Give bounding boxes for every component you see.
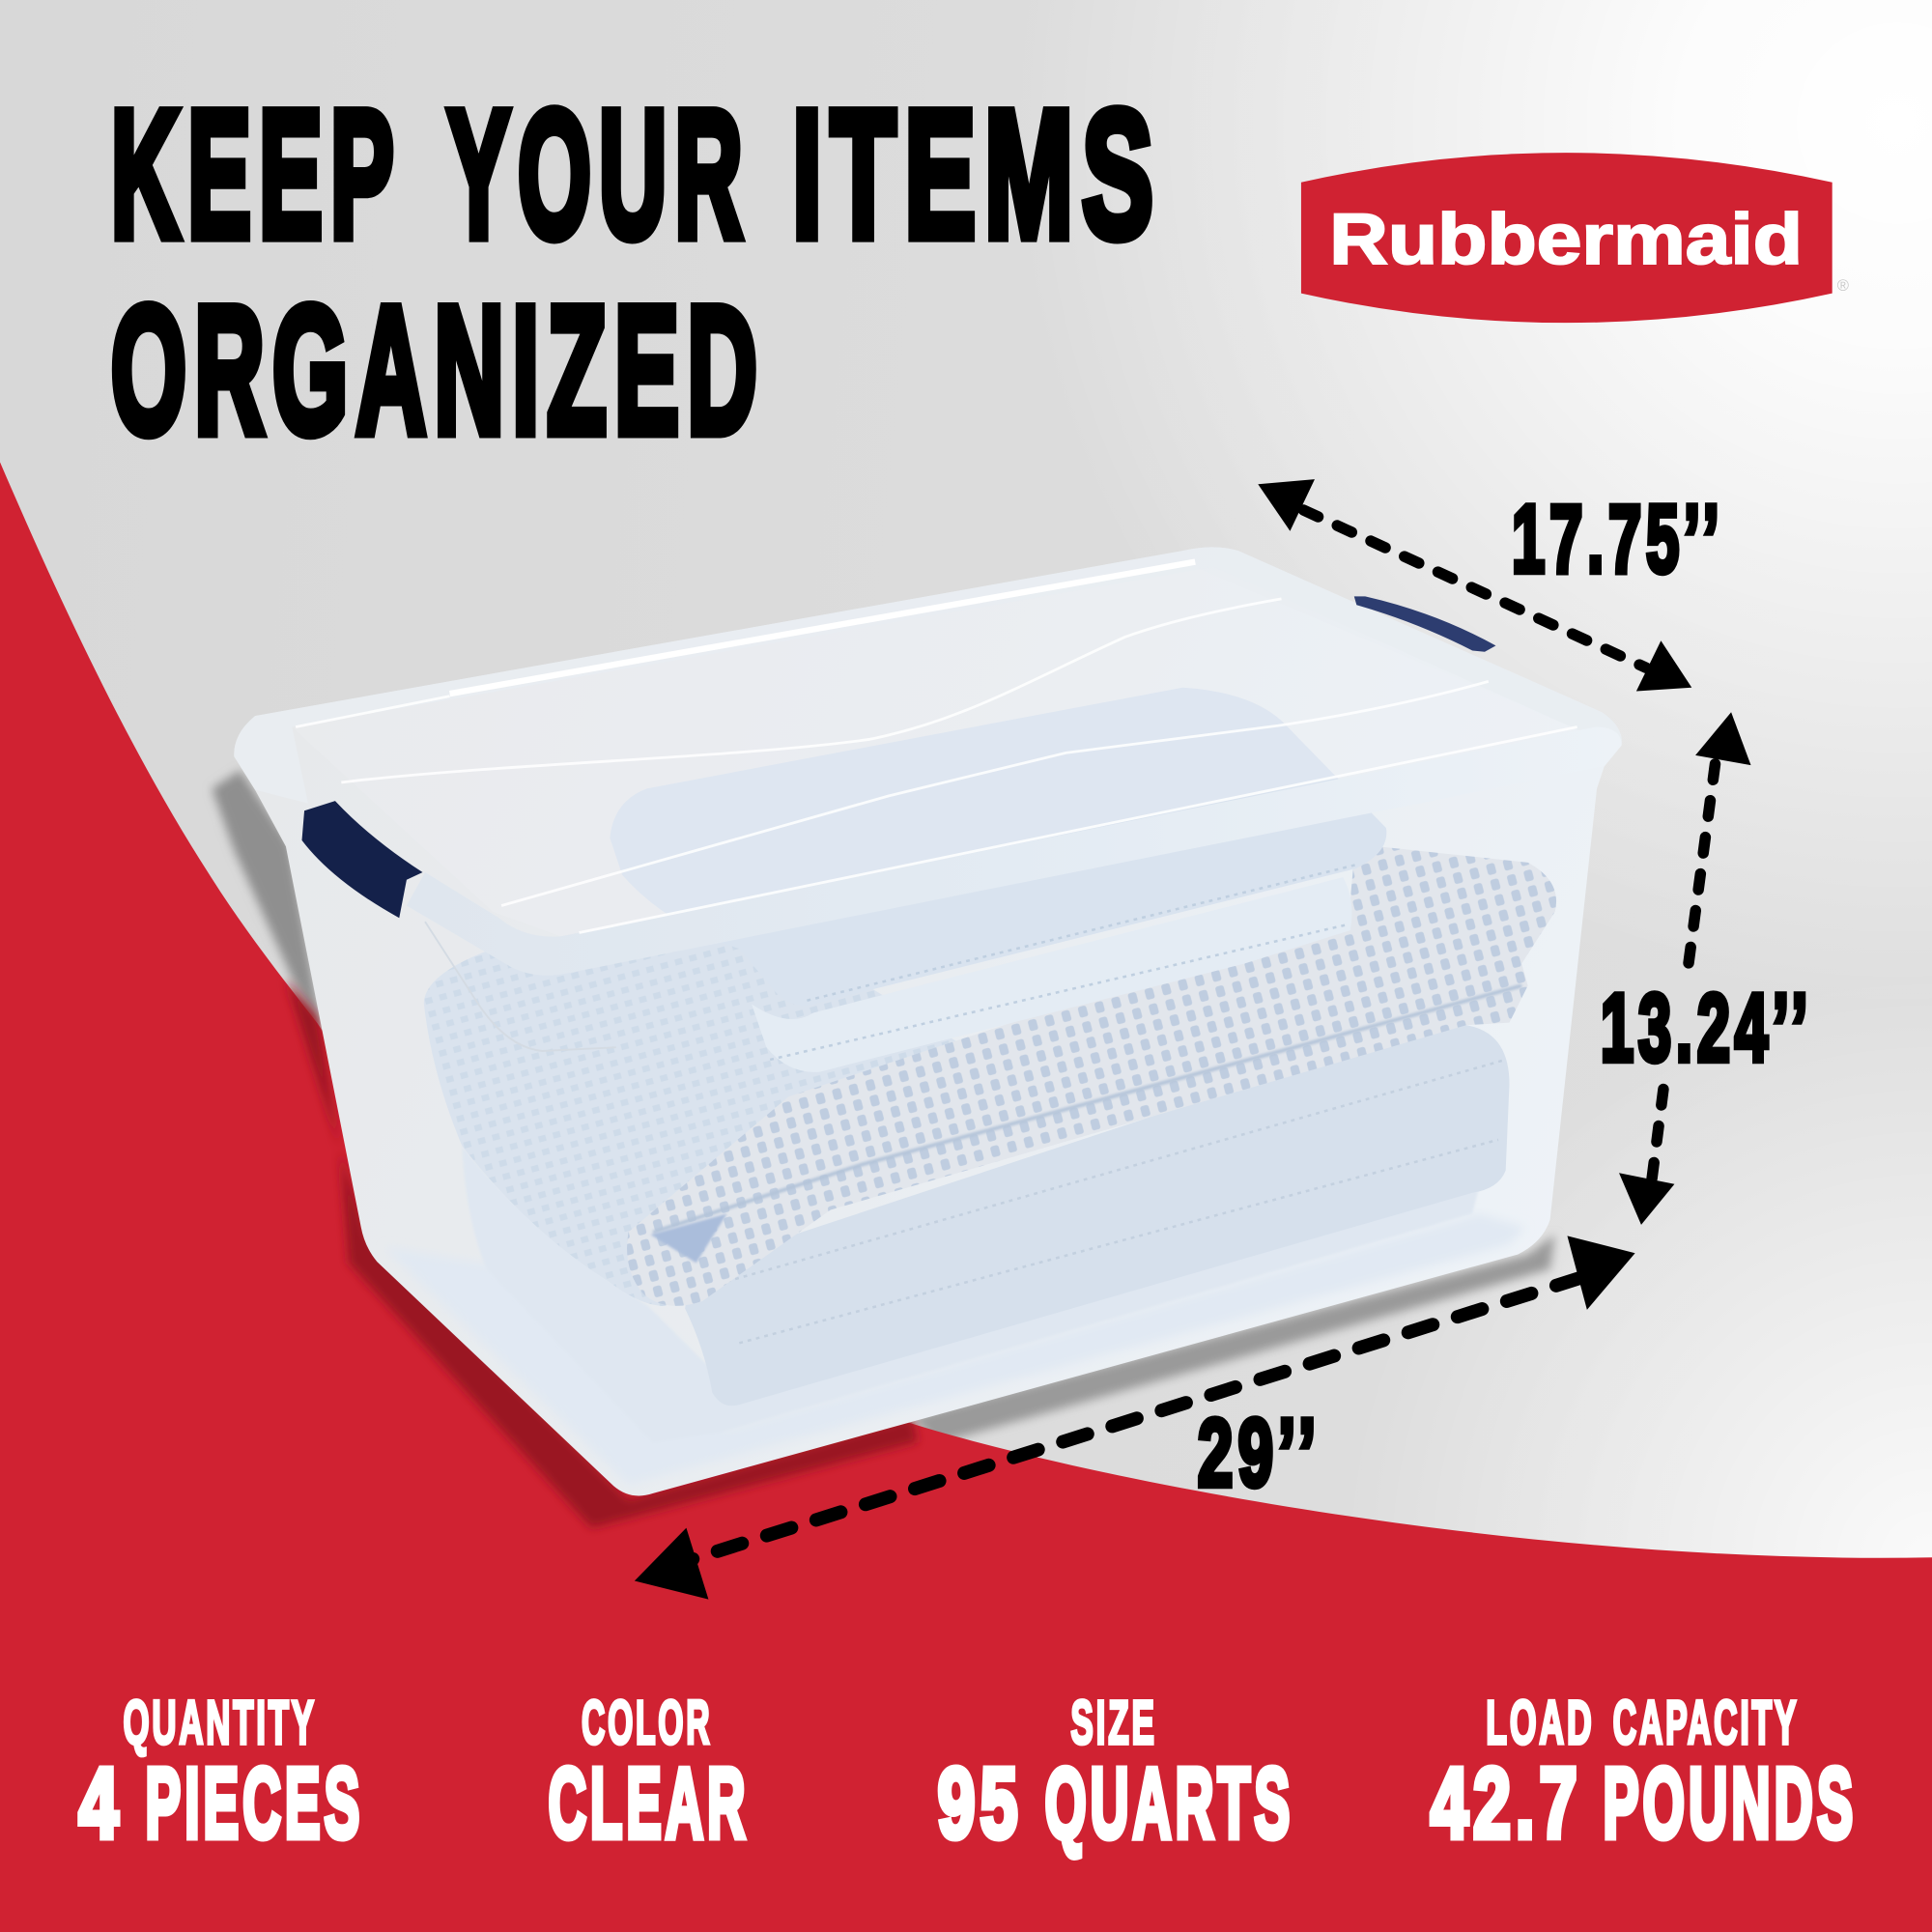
spec: quantity: QUANTITY: [124, 1688, 317, 1757]
lid translucent top: [292, 564, 1577, 936]
spec: size: QUARTS: [1045, 1747, 1293, 1859]
storage box: [234, 547, 1622, 1495]
arrow: height dimension: [1619, 712, 1750, 1225]
icon: left navy latch: [301, 801, 423, 918]
box base tint: [384, 1213, 1525, 1485]
arrow: length dimension: [635, 1236, 1635, 1600]
box shadow on red: [286, 980, 918, 1528]
spec: color: COLOR: [582, 1688, 712, 1757]
waffle blanket soft part: [424, 936, 985, 1306]
spec: size: [938, 1688, 1293, 1859]
spec: quantity: 4: [79, 1747, 118, 1859]
arrow: width dimension: [1258, 479, 1691, 692]
red swoosh background: [0, 462, 1932, 1932]
Rubbermaid logo: ®: [1837, 276, 1849, 295]
latch bracket: [425, 922, 616, 1051]
front rim: [407, 727, 1622, 976]
spec: color: CLEAR: [549, 1747, 750, 1859]
spec: load capacity: LOAD: [1486, 1688, 1595, 1757]
folded linens: [424, 688, 1556, 1443]
spec: size: SIZE: [1070, 1688, 1157, 1757]
spec: quantity: [79, 1688, 363, 1859]
lid white ridge: [450, 562, 1195, 694]
quilted bedding: [685, 1025, 1509, 1406]
quilted stitching: [727, 1060, 1506, 1343]
spec: quantity: PIECES: [146, 1747, 363, 1859]
middle folded sheet: [752, 877, 1351, 1072]
Rubbermaid logo: [1301, 153, 1849, 323]
title: KEEP: [111, 72, 402, 275]
bottom white sheet: [462, 1146, 1479, 1443]
dimension label: length: 29’’: [1198, 1400, 1321, 1507]
dimension label: depth: 17.75’’: [1512, 486, 1723, 593]
Rubbermaid logo: Rubbermaid: [1329, 199, 1803, 279]
gray box shadow: [212, 770, 1555, 1444]
title: ITEMS: [792, 72, 1162, 275]
box silhouette: [234, 547, 1622, 1495]
spec: size: 95: [938, 1747, 1023, 1859]
lid back band: [234, 547, 1622, 804]
title: [111, 72, 1162, 471]
title: YOUR: [447, 72, 751, 275]
lid: [234, 547, 1622, 1051]
sheet seam: [770, 865, 1355, 1060]
upper folded sheet: [610, 688, 1386, 1006]
lid highlights: [296, 599, 1577, 933]
waffle fold shadow: [653, 985, 1521, 1233]
icon: right navy latch: [1354, 596, 1495, 652]
spec: load capacity: 42.7: [1431, 1747, 1582, 1859]
spec: load capacity: [1431, 1688, 1857, 1859]
spec: color: [549, 1688, 750, 1859]
waffle blanket: [627, 844, 1556, 1306]
title: ORGANIZED: [111, 269, 765, 471]
